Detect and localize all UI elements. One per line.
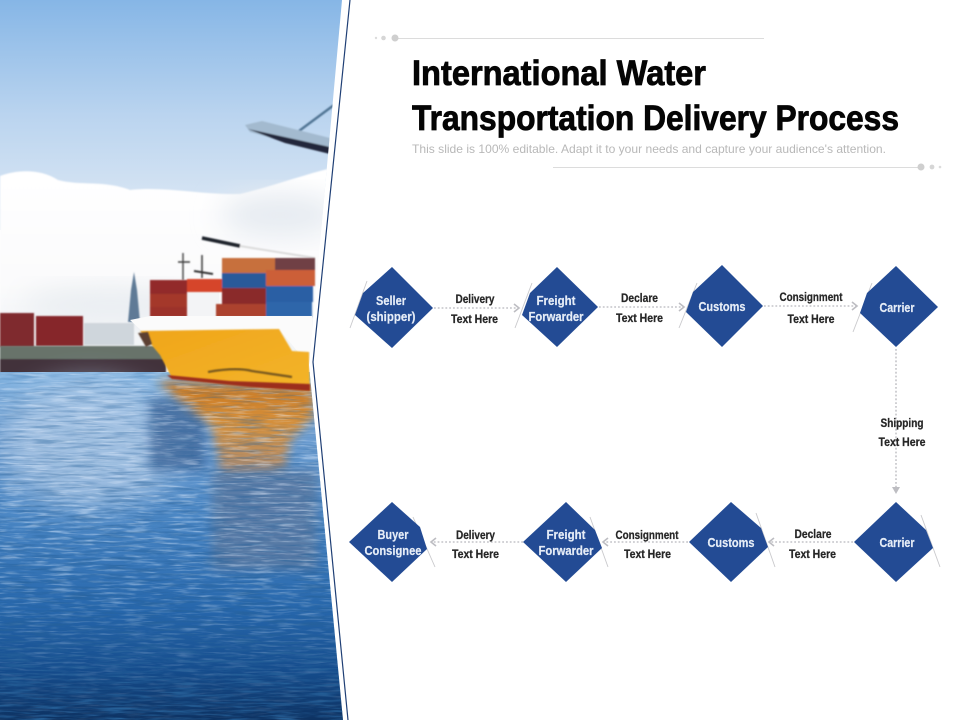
top decorative dots and rule <box>375 34 764 42</box>
grey reflection <box>212 470 317 570</box>
label: Consignment <box>616 528 678 561</box>
arrow: seller to forwarder <box>434 304 519 312</box>
ship crane boom <box>178 238 315 280</box>
title: International Water <box>412 54 706 93</box>
arrow: customs to forwarder <box>603 538 688 546</box>
ripples <box>0 372 345 720</box>
step: Seller (shipper) <box>350 267 433 348</box>
label: Consignment: Consignment <box>616 528 678 542</box>
label: Declare <box>789 527 836 561</box>
label: Delivery: Delivery <box>456 528 495 542</box>
step: Freight Forwarder: Freight <box>546 528 586 542</box>
label: Delivery: Text Here <box>451 312 498 326</box>
label: Delivery: Delivery <box>456 292 495 306</box>
step: Freight Forwarder: Forwarder <box>538 544 594 558</box>
quay wall <box>0 346 166 374</box>
label: Consignment: Text Here <box>624 547 671 561</box>
step: Buyer Consignee: Consignee <box>364 544 422 558</box>
step: Customs: Customs <box>708 536 755 550</box>
hull lettering <box>208 369 292 377</box>
label: Declare: Declare <box>621 291 658 305</box>
sky <box>0 0 345 230</box>
step: Freight Forwarder: Freight <box>536 294 576 308</box>
yellow hull <box>140 329 310 391</box>
label: Consignment: Text Here <box>788 312 835 326</box>
hull waterline <box>167 375 310 391</box>
label: Declare: Text Here <box>789 547 836 561</box>
sea <box>0 372 345 720</box>
step: Carrier <box>853 266 938 347</box>
step: Freight Forwarder <box>515 267 598 347</box>
label: Declare: Text Here <box>616 311 663 325</box>
label: Delivery <box>451 292 498 326</box>
label: Shipping: Text Here <box>878 435 926 449</box>
cloud reflection <box>0 380 180 510</box>
subtitle: This slide is 100% editable. Adapt it to your needs and capture your audience's attention. <box>412 142 886 156</box>
step: Buyer Consignee: Buyer <box>378 528 409 542</box>
superstructure <box>187 292 219 320</box>
step: Carrier <box>854 502 940 582</box>
flow: bottom row <box>349 502 940 582</box>
label: Shipping <box>878 416 926 449</box>
dark hull reflection <box>150 398 205 470</box>
distant tower <box>128 272 140 322</box>
arrow: forwarder to customs <box>599 303 684 311</box>
bow shadow <box>138 332 152 347</box>
step: Carrier: Carrier <box>880 301 915 315</box>
container ship <box>130 238 315 391</box>
step: Customs: Customs <box>698 300 746 314</box>
title: Transportation Delivery Process <box>412 99 899 138</box>
dark ripples <box>0 372 345 720</box>
step: Freight Forwarder <box>523 502 608 582</box>
white deck <box>130 316 312 352</box>
arrow: forwarder to buyer <box>431 538 523 546</box>
step: Seller (shipper): (shipper) <box>366 310 416 324</box>
step: Buyer Consignee <box>349 502 435 582</box>
bottom decorative dots and rule <box>553 164 941 170</box>
arrow: vertical shipping connector <box>892 349 900 494</box>
flow: top row <box>350 265 938 348</box>
clouds <box>0 165 345 375</box>
label: Consignment: Consignment <box>780 290 842 304</box>
label: Consignment <box>780 290 842 326</box>
step: Freight Forwarder: Forwarder <box>528 310 584 324</box>
label: Declare <box>616 291 663 325</box>
arrow: carrier to customs <box>769 538 853 546</box>
step: Customs <box>689 502 775 582</box>
container stacks <box>150 258 315 317</box>
crane arm <box>245 105 334 154</box>
label: Shipping: Shipping <box>880 416 924 430</box>
red quay containers <box>0 313 83 347</box>
quay buildings <box>84 323 134 345</box>
step: Customs <box>679 265 763 347</box>
step: Carrier: Carrier <box>880 536 915 550</box>
title <box>412 54 899 138</box>
step: Seller (shipper): Seller <box>376 294 406 308</box>
label: Delivery: Text Here <box>452 547 499 561</box>
panel: harbour photo <box>0 0 345 720</box>
label: Declare: Declare <box>794 527 832 541</box>
photo border line <box>313 0 350 720</box>
label: Delivery <box>452 528 499 561</box>
arrow: customs to carrier <box>764 302 857 310</box>
orange hull reflection <box>157 381 315 476</box>
